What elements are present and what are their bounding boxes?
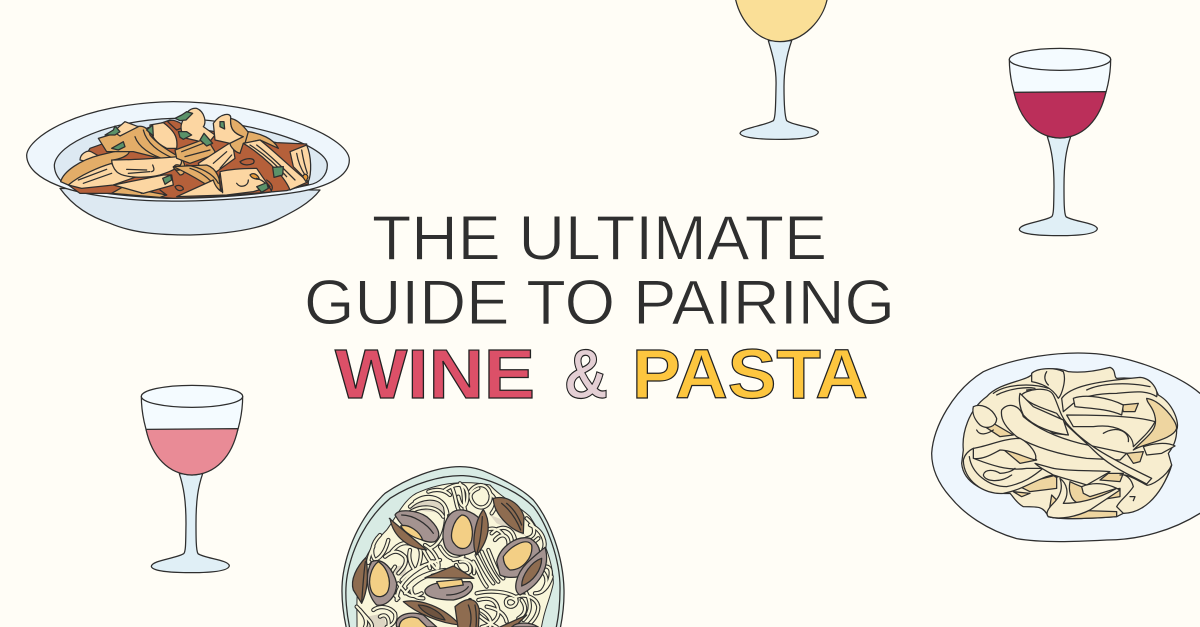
illustration: white wine glass <box>735 0 827 139</box>
glass stem and foot <box>151 474 229 573</box>
title word: wine: WINE <box>335 335 535 413</box>
title ampersand: & <box>564 335 608 413</box>
clam: right <box>497 538 547 595</box>
illustration: rose wine glass <box>141 385 243 573</box>
rose wine <box>146 429 238 475</box>
clam: top centre <box>443 509 488 555</box>
glass stem and foot <box>1019 137 1097 236</box>
red wine <box>1014 92 1106 138</box>
illustration: red wine glass <box>1009 48 1111 236</box>
glass bowl <box>1009 59 1111 138</box>
glass rim <box>1009 48 1111 70</box>
clam: top left <box>389 511 439 550</box>
title line 2: GUIDE TO PAIRING <box>304 268 895 338</box>
glass rim <box>141 385 243 407</box>
clam: centre <box>425 566 474 600</box>
clam: bottom <box>396 600 479 627</box>
clam: top right shell <box>493 498 524 533</box>
illustration: plate of linguine with clams <box>342 467 564 627</box>
clam: left <box>352 557 397 605</box>
illustration: bowl of penne with tomato sauce <box>27 102 349 235</box>
title <box>304 204 895 413</box>
glass stem and foot <box>740 41 818 139</box>
clam: bottom right <box>493 615 538 627</box>
title line 1: THE ULTIMATE <box>372 204 827 274</box>
illustration: plate of fettuccine <box>932 353 1200 542</box>
title word: pasta: PASTA <box>632 335 868 413</box>
white wine in bowl <box>735 0 827 42</box>
glass bowl <box>141 396 243 475</box>
